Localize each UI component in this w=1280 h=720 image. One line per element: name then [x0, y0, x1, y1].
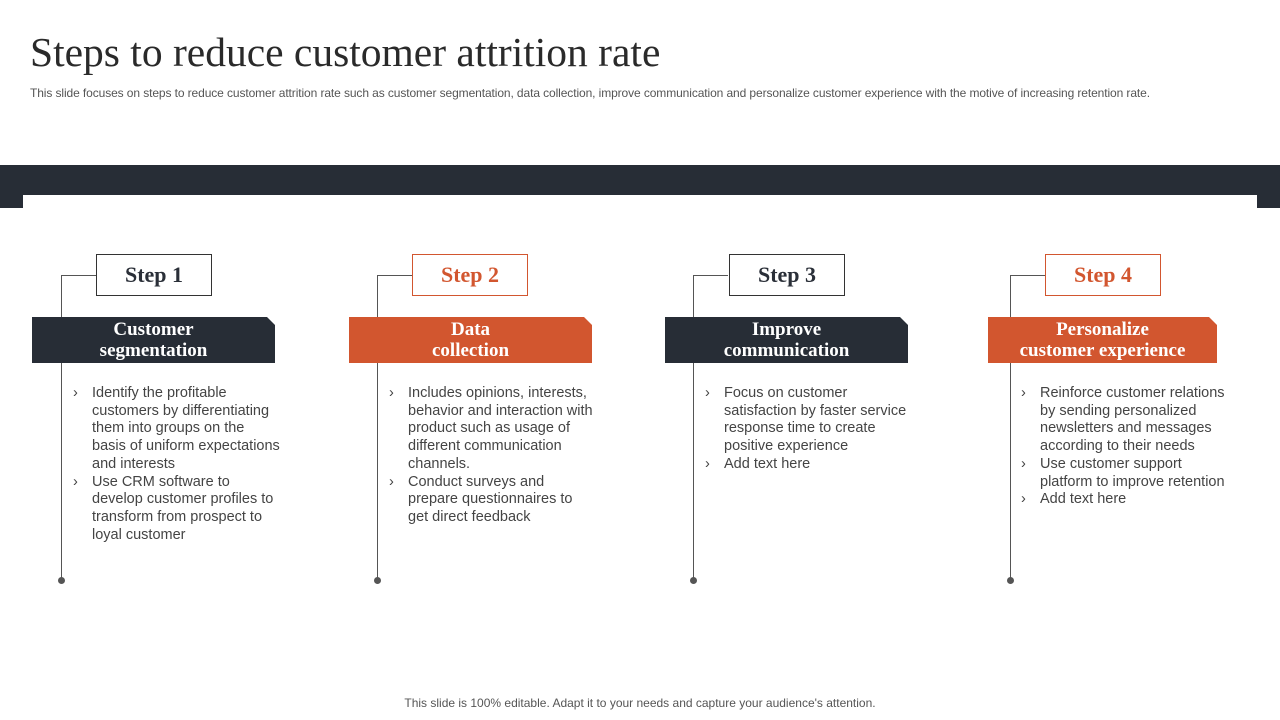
banner: data collection: [349, 317, 592, 363]
column 4: [988, 254, 1225, 584]
text: step 1: Use CRM software to develop customer profiles to transform from prospect to loyal customer: [92, 474, 273, 543]
subtitle: This slide focuses on steps to reduce customer attrition rate such as customer segmentation, data collection, improve communication and personalize customer experience with the motive of increasing retention rate.: [30, 86, 1150, 100]
banner: data collection: Data: [451, 319, 490, 340]
banner: customer segmentation: segmentation: [100, 340, 207, 361]
text: step 2: Includes opinions, interests, behavior and interaction with product such as usage of different communication channels.: [408, 385, 593, 472]
text: step 2: Conduct surveys and prepare questionnaires to get direct feedback: [408, 474, 572, 525]
text: step 4: Reinforce customer relations by sending personalized newsletters and messages according to their needs: [1040, 385, 1225, 454]
step 2 label: Step 2: [441, 262, 499, 287]
column 1: [32, 254, 280, 584]
title: Steps to reduce customer attrition rate: [30, 29, 660, 75]
footer note: This slide is 100% editable. Adapt it to your needs and capture your audience's attention.: [404, 696, 876, 710]
text: step 4: Use customer support platform to improve retention: [1040, 456, 1225, 490]
dark header band: [0, 165, 1280, 208]
text: step 2: [390, 385, 593, 525]
text: step 3: Focus on customer satisfaction by faster service response time to create positive experience: [724, 385, 906, 454]
text: step 4: Add text here: [1040, 491, 1126, 507]
banner: improve communication: [665, 317, 908, 363]
column 3: [665, 254, 908, 584]
step 2 label: [412, 254, 528, 296]
banner: improve communication: communication: [724, 340, 849, 361]
banner: personalize customer experience: [988, 317, 1217, 363]
column 2: [349, 254, 593, 584]
step 3 label: Step 3: [758, 262, 816, 287]
banner: improve communication: Improve: [752, 319, 821, 340]
step 4 label: Step 4: [1074, 262, 1132, 287]
text: step 1: [74, 385, 280, 543]
step 3 label: [729, 254, 845, 296]
white card: [23, 195, 1257, 615]
banner: customer segmentation: Customer: [113, 319, 194, 340]
text: step 3: Add text here: [724, 456, 810, 472]
step 1 label: [96, 254, 212, 296]
step 1 label: Step 1: [125, 262, 183, 287]
banner: personalize customer experience: Personalize: [1056, 319, 1149, 340]
banner: customer segmentation: [32, 317, 275, 363]
banner: data collection: collection: [432, 340, 509, 361]
text: step 4: [1022, 385, 1225, 507]
step 4 label: [1045, 254, 1161, 296]
text: step 1: Identify the profitable customers by differentiating them into groups on the basis of uniform expectations and interests: [92, 385, 280, 472]
banner: personalize customer experience: customer experience: [1020, 340, 1185, 361]
